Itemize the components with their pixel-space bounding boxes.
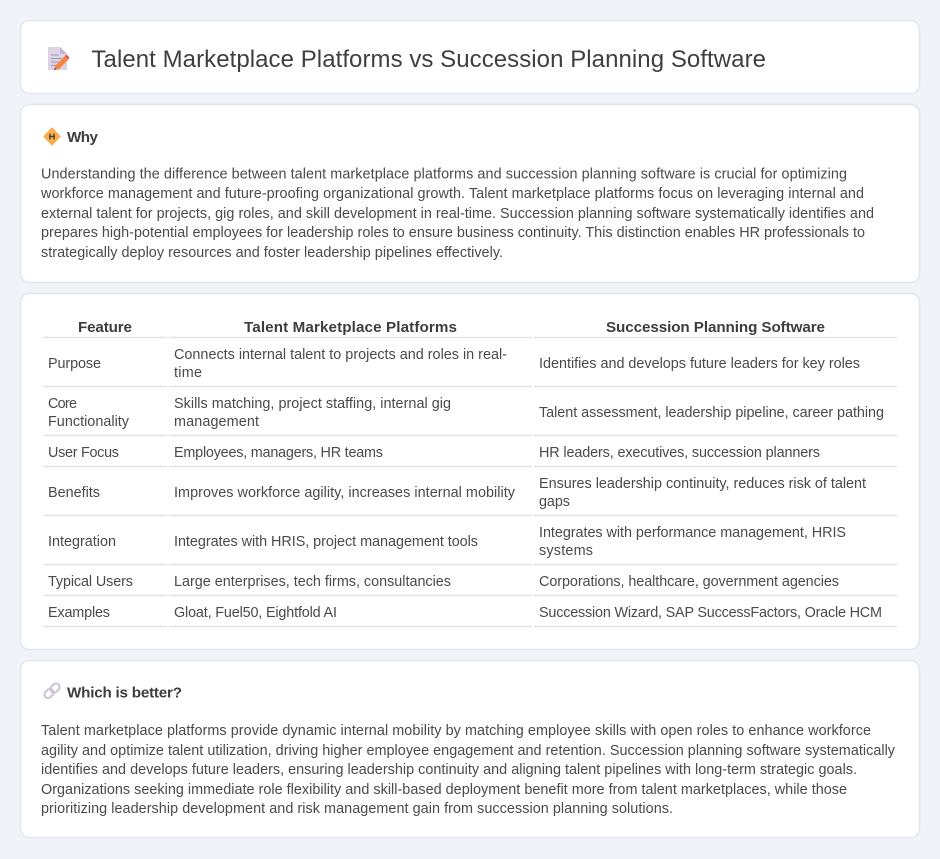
table row: purpose: Purpose <box>48 356 101 372</box>
table row: typical users: Typical Users <box>48 574 133 590</box>
table row: integration: Integrates with HRIS, project management tools <box>174 534 478 550</box>
table row: typical users <box>43 574 897 596</box>
table row: user focus: HR leaders, executives, succession planners <box>539 445 820 461</box>
table row: core functionality <box>43 396 897 436</box>
table row: core functionality: Skills matching, project staffing, internal gig <box>174 396 451 412</box>
table header row: Feature <box>78 319 132 336</box>
table row: integration <box>43 525 897 564</box>
table header row: Succession Planning Software <box>606 319 825 336</box>
table row: integration: Integration <box>48 534 116 550</box>
table row: examples: Gloat, Fuel50, Eightfold AI <box>174 605 337 621</box>
text block: which is better paragraph <box>41 723 896 817</box>
table row: benefits: Improves workforce agility, increases internal mobility <box>174 485 516 501</box>
icon: document with pencil <box>48 47 70 70</box>
table row: examples: Examples <box>48 605 110 621</box>
table row: examples <box>43 605 897 626</box>
table row: user focus <box>43 445 897 466</box>
table row: benefits: gaps <box>539 494 570 510</box>
table header row: Talent Marketplace Platforms <box>244 319 457 336</box>
table row: typical users: Corporations, healthcare, government agencies <box>539 574 839 590</box>
text block: which is better paragraph: prioritizing leadership development and risk management gain from succession planning solutions. <box>41 801 673 817</box>
table row: benefits: Benefits <box>48 485 100 501</box>
text block: which is better paragraph: Organizations seeking immediate role flexibility and skill-based deployment benefit more from talent marketplaces, while those <box>41 782 847 798</box>
panel: why <box>20 104 920 282</box>
text block: which is better paragraph: Talent marketplace platforms provide dynamic internal mobility by matching employee skills with open roles to enhance workforce <box>41 723 871 739</box>
title: Talent Marketplace Platforms vs Succession Planning Software <box>92 46 766 73</box>
text block: which is better paragraph: agility and optimize talent utilization, driving higher employee engagement and retention. Succession planning software systematically <box>41 743 896 759</box>
table row: purpose <box>43 347 897 386</box>
text block: why paragraph <box>40 166 874 261</box>
table row: purpose: Connects internal talent to projects and roles in real- <box>174 347 507 363</box>
icon: orange diamond sign <box>44 128 60 145</box>
panel: comparison table <box>20 294 920 650</box>
heading: why: Why <box>67 129 99 146</box>
text block: which is better paragraph: identifies and develops future leaders, ensuring leadership continuity and aligning talent pipelines with long-term strategic goals. <box>41 762 857 778</box>
table row: user focus: User Focus <box>48 445 119 461</box>
heading: which is better: Which is better? <box>67 684 182 702</box>
table row: examples: Succession Wizard, SAP SuccessFactors, Oracle HCM <box>539 605 882 621</box>
table row: core functionality: Core <box>48 396 77 412</box>
text block: why paragraph: external talent for projects, gig roles, and skill development in real-time. Succession planning software systematically identifies and <box>41 206 874 222</box>
table row: typical users: Large enterprises, tech firms, consultancies <box>174 574 451 590</box>
panel: title header <box>20 20 920 94</box>
table row: core functionality: Functionality <box>48 414 130 430</box>
table row: user focus: Employees, managers, HR teams <box>174 445 383 461</box>
table row: core functionality: management <box>174 414 259 430</box>
panel: which is better <box>20 660 920 838</box>
text block: why paragraph: strategically deploy resources and foster leadership pipelines effectively. <box>41 245 503 261</box>
table row: purpose: Identifies and develops future leaders for key roles <box>539 356 860 372</box>
table row: benefits: Ensures leadership continuity, reduces risk of talent <box>539 476 866 492</box>
text block: why paragraph: prepares high-potential employees for leadership roles to ensure business continuity. This distinction enables HR professionals to <box>41 225 865 241</box>
table row: integration: Integrates with performance management, HRIS <box>539 525 846 541</box>
table header row <box>43 319 897 338</box>
text block: why paragraph: Understanding the difference between talent marketplace platforms and succession planning software is crucial for optimizing <box>41 166 847 182</box>
table row: benefits <box>43 476 897 516</box>
table row: integration: systems <box>539 543 593 559</box>
icon: chain link <box>43 682 61 700</box>
text block: why paragraph: workforce management and future-proofing organizational growth. Talent marketplace platforms focus on leveraging internal and <box>40 186 864 202</box>
table row: core functionality: Talent assessment, leadership pipeline, career pathing <box>539 405 884 421</box>
table row: purpose: time <box>174 365 202 381</box>
